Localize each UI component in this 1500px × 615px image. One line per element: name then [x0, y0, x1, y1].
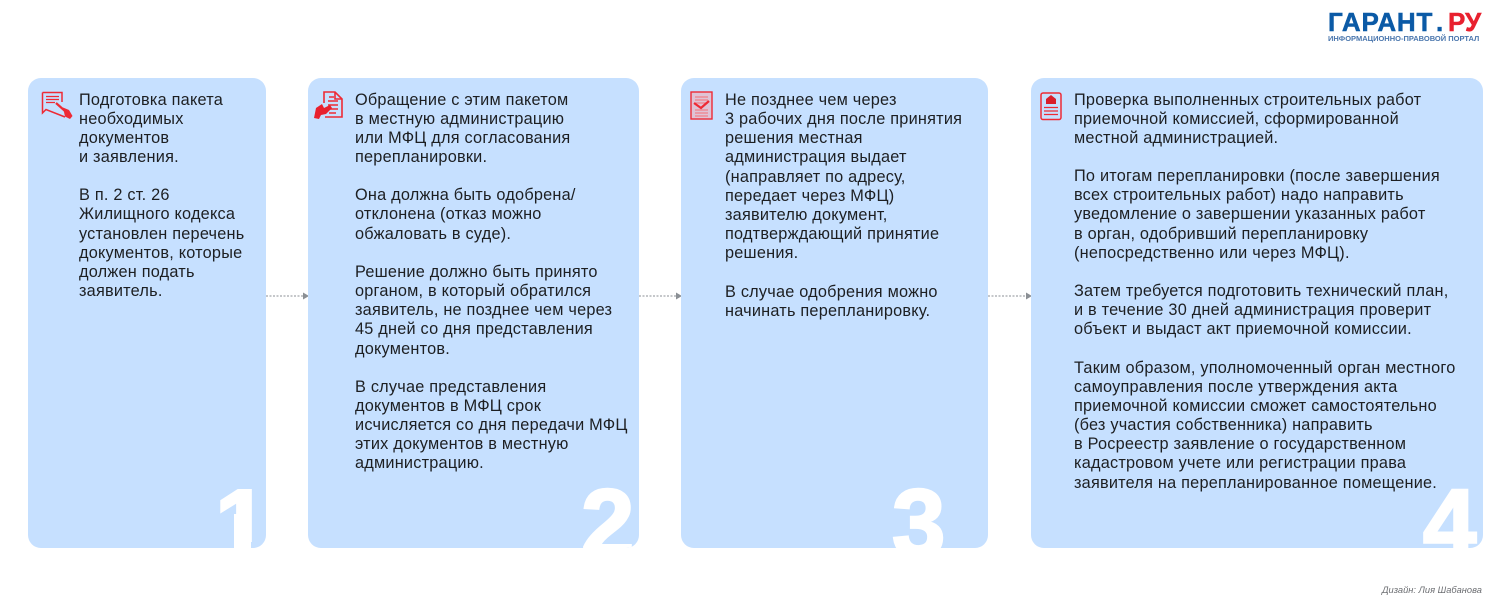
text: step 1: и заявления.	[79, 148, 179, 166]
text: step 1: должен подать	[79, 263, 195, 281]
text: step 4: Затем требуется подготовить технический план,	[1074, 282, 1448, 300]
text: step 2: органом, в который обратился	[355, 282, 591, 300]
text: step 4: (непосредственно или через МФЦ).	[1074, 244, 1350, 262]
logo wordmark	[1328, 7, 1482, 37]
number 1	[220, 489, 252, 548]
text: step 4: объект и выдаст акт приемочной комиссии.	[1074, 320, 1412, 338]
text: step 2: этих документов в местную	[355, 435, 569, 453]
text: step 2: обжаловать в суде).	[355, 225, 511, 243]
text: step 3: 3 рабочих дня после принятия	[725, 110, 962, 128]
text: step 4: самоуправления после утверждения акта	[1074, 378, 1398, 396]
text: step 4: уведомление о завершении указанных работ	[1074, 205, 1426, 223]
text: step 1: документов, которые	[79, 244, 242, 262]
text: step 2: Она должна быть одобрена/	[355, 186, 576, 204]
text: step 4: Таким образом, уполномоченный орган местного	[1074, 359, 1455, 377]
icon: document with hand	[314, 91, 343, 119]
text: step 4: в Росреестр заявление о государственном	[1074, 435, 1406, 453]
text: step 1: установлен перечень	[79, 225, 244, 243]
text: step 4: Проверка выполненных строительных работ	[1074, 90, 1421, 108]
text: step 4	[1074, 90, 1455, 492]
icon: document with building	[1040, 92, 1062, 120]
text: step 2	[355, 90, 628, 472]
text: step 1: Подготовка пакета	[79, 90, 223, 108]
icon: document with check mark	[690, 91, 713, 120]
text: step 1: необходимых	[79, 110, 184, 128]
arrow 3 to 4	[988, 292, 1031, 300]
text: step 2: отклонена (отказ можно	[355, 205, 542, 223]
text: step 2: документов в МФЦ срок	[355, 397, 541, 415]
text: step 2: или МФЦ для согласования	[355, 129, 570, 147]
text: step 4: всех строительных работ) надо направить	[1074, 186, 1404, 204]
credit: Дизайн: Лия Шабанова	[1382, 585, 1482, 595]
text: step 3: (направляет по адресу,	[725, 168, 906, 186]
text: step 2: Решение должно быть принято	[355, 263, 598, 281]
logo	[1328, 7, 1482, 43]
text: step 4: местной администрацией.	[1074, 129, 1278, 147]
text: step 3: решения.	[725, 244, 798, 262]
text: step 3: заявителю документ,	[725, 206, 888, 224]
arrow 2 to 3	[639, 292, 681, 300]
text: step 3: начинать перепланировку.	[725, 302, 930, 320]
text: step 4: и в течение 30 дней администрация проверит	[1074, 301, 1431, 319]
text: step 2: администрацию.	[355, 454, 484, 472]
text: step 3: Не позднее чем через	[725, 91, 897, 109]
text: step 1: документов	[79, 129, 169, 147]
text: step 4: По итогам перепланировки (после завершения	[1074, 167, 1440, 185]
text: step 3: В случае одобрения можно	[725, 283, 938, 301]
logo wordmark: РУ	[1448, 7, 1481, 37]
text: step 4: (без участия собственника) направить	[1074, 416, 1373, 434]
text: step 3: подтверждающий принятие	[725, 225, 939, 243]
text: step 4: приемочной комиссией, сформированной	[1074, 110, 1399, 128]
logo tagline: ИНФОРМАЦИОННО-ПРАВОВОЙ ПОРТАЛ	[1328, 34, 1479, 43]
text: step 2: Обращение с этим пакетом	[355, 90, 568, 108]
text: step 2: В случае представления	[355, 378, 546, 396]
text: step 4: заявителя на перепланированное помещение.	[1074, 474, 1437, 492]
text: step 2: заявитель, не позднее чем через	[355, 301, 612, 319]
logo wordmark: ГАРАНТ	[1328, 7, 1433, 37]
panel: step 2	[308, 78, 639, 548]
text: step 3: решения местная	[725, 129, 863, 147]
number 1 stem	[234, 514, 251, 548]
text: step 4: приемочной комиссии сможет самостоятельно	[1074, 397, 1437, 415]
text: step 2: 45 дней со дня представления	[355, 320, 593, 338]
text: step 2: перепланировки.	[355, 148, 487, 166]
text: step 1	[79, 90, 244, 300]
text: step 3: передает через МФЦ)	[725, 187, 894, 205]
text: step 4: в орган, одобривший перепланировку	[1074, 225, 1368, 243]
arrow 1 to 2	[266, 292, 308, 300]
panel: step 4	[1031, 78, 1483, 548]
text: step 4: кадастровом учете или регистрации права	[1074, 454, 1406, 472]
panel: step 3	[681, 78, 988, 548]
panel: step 1	[28, 78, 266, 548]
text: step 3	[725, 91, 962, 320]
text: step 3: администрация выдает	[725, 148, 907, 166]
logo wordmark: .	[1436, 7, 1444, 37]
text: step 2: в местную администрацию	[355, 110, 564, 128]
text: step 2: документов.	[355, 340, 450, 358]
icon: document with pen	[42, 92, 72, 119]
text: step 1: В п. 2 ст. 26	[79, 186, 170, 204]
text: step 1: заявитель.	[79, 282, 163, 300]
text: step 1: Жилищного кодекса	[79, 205, 235, 223]
text: step 2: исчисляется со дня передачи МФЦ	[355, 416, 628, 434]
